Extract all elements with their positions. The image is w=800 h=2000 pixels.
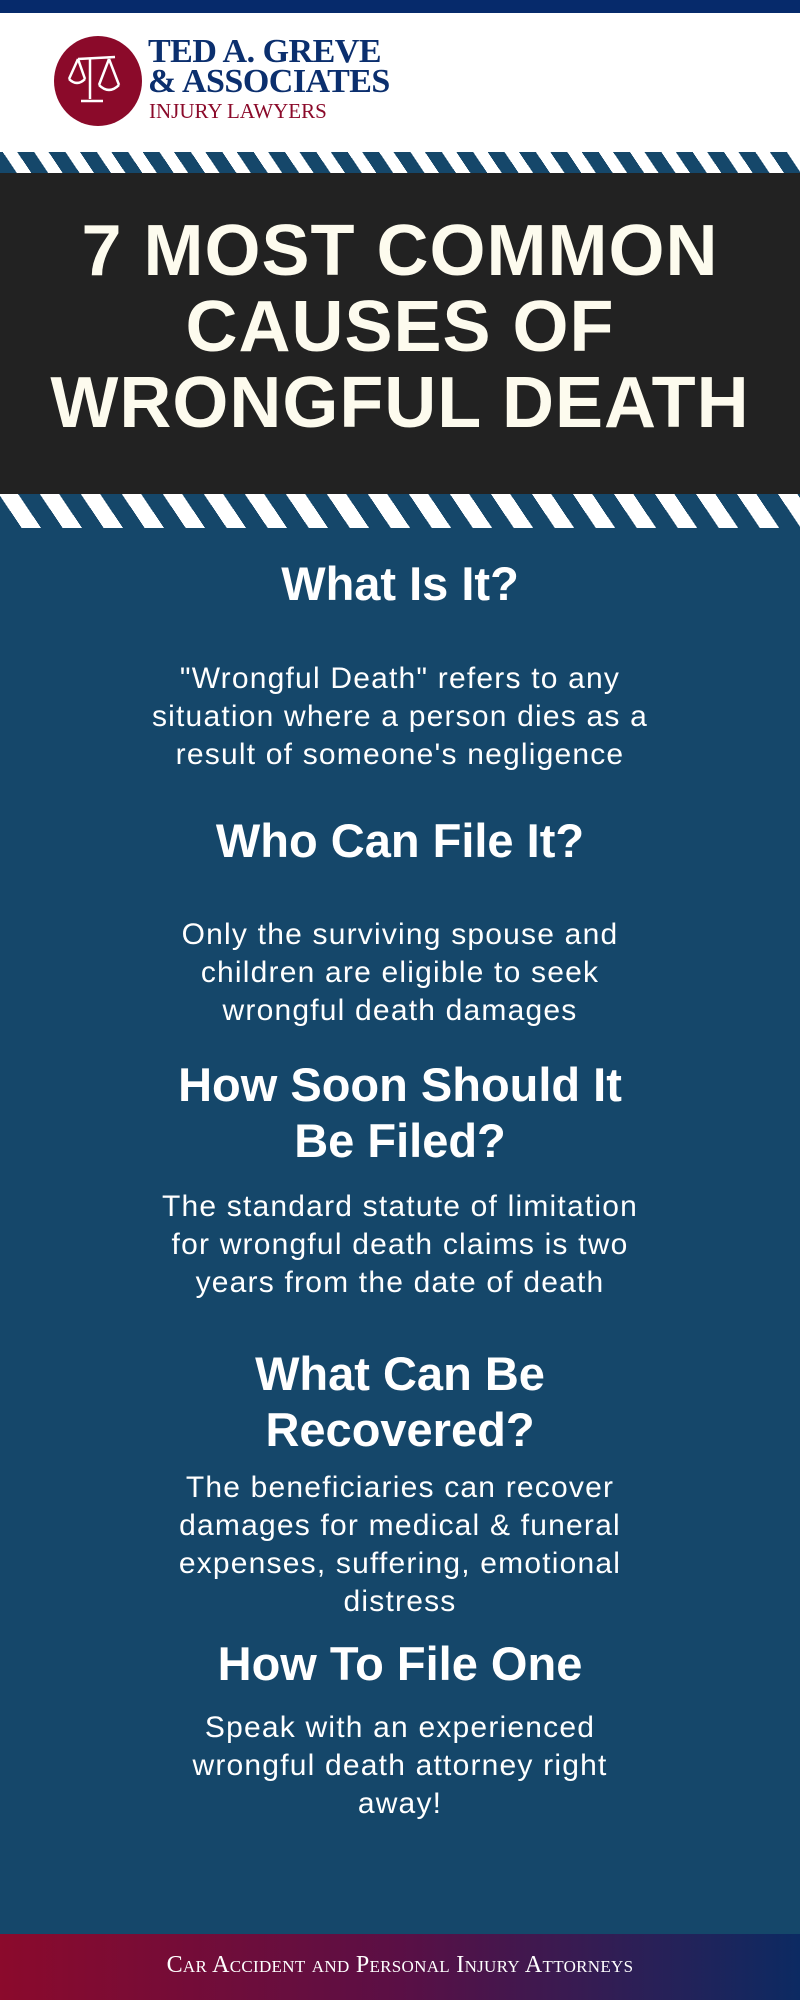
heading: Recovered? [265, 1403, 535, 1456]
header: white logo area [0, 13, 800, 153]
text: The standard statute of limitation [162, 1190, 638, 1223]
text: wrongful death attorney right [192, 1749, 608, 1782]
text: children are eligible to seek [201, 956, 599, 989]
text [192, 1711, 608, 1820]
logo text: TED A. GREVE [148, 33, 381, 70]
text: Speak with an experienced [205, 1711, 595, 1744]
heading: Be Filed? [294, 1114, 506, 1167]
footer [0, 1934, 800, 2000]
heading: Who Can File It? [216, 814, 584, 867]
text: "Wrongful Death" refers to any [180, 662, 620, 695]
text: for wrongful death claims is two [172, 1228, 628, 1261]
text [182, 918, 618, 1027]
title panel [0, 173, 800, 494]
footer text: Car Accident and Personal Injury Attorneys [167, 1952, 633, 1978]
logo text [148, 33, 390, 100]
stripes top [0, 152, 800, 173]
text [179, 1471, 621, 1618]
top bar [0, 0, 800, 13]
section: what is it [152, 557, 648, 771]
title: WRONGFUL DEATH [50, 363, 750, 443]
section: who can file [182, 814, 618, 1027]
stripes bottom [0, 494, 800, 528]
logo [54, 33, 390, 126]
text: damages for medical & funeral [179, 1509, 621, 1542]
title [50, 211, 750, 443]
text [152, 662, 648, 771]
text [162, 1190, 638, 1299]
heading: How Soon Should It [178, 1058, 622, 1111]
section: how to file [192, 1637, 608, 1820]
text: Only the surviving spouse and [182, 918, 618, 951]
heading [255, 1347, 545, 1456]
text: expenses, suffering, emotional [179, 1547, 621, 1580]
heading: How To File One [218, 1637, 582, 1690]
text: wrongful death damages [223, 994, 577, 1027]
logo text: & ASSOCIATES [148, 63, 390, 100]
title: CAUSES OF [185, 287, 615, 367]
heading: What Can Be [255, 1347, 545, 1400]
text: The beneficiaries can recover [186, 1471, 614, 1504]
icon: scales emblem [54, 36, 142, 126]
heading [178, 1058, 622, 1167]
text: years from the date of death [196, 1266, 604, 1299]
text: result of someone's negligence [176, 738, 624, 771]
section: what can be recovered [179, 1347, 621, 1618]
text: situation where a person dies as a [152, 700, 648, 733]
logo: INJURY LAWYERS [149, 99, 327, 123]
heading: What Is It? [281, 557, 519, 610]
section: how soon [162, 1058, 638, 1299]
text: away! [358, 1787, 442, 1820]
title: 7 MOST COMMON [82, 211, 718, 291]
text: distress [344, 1585, 456, 1618]
